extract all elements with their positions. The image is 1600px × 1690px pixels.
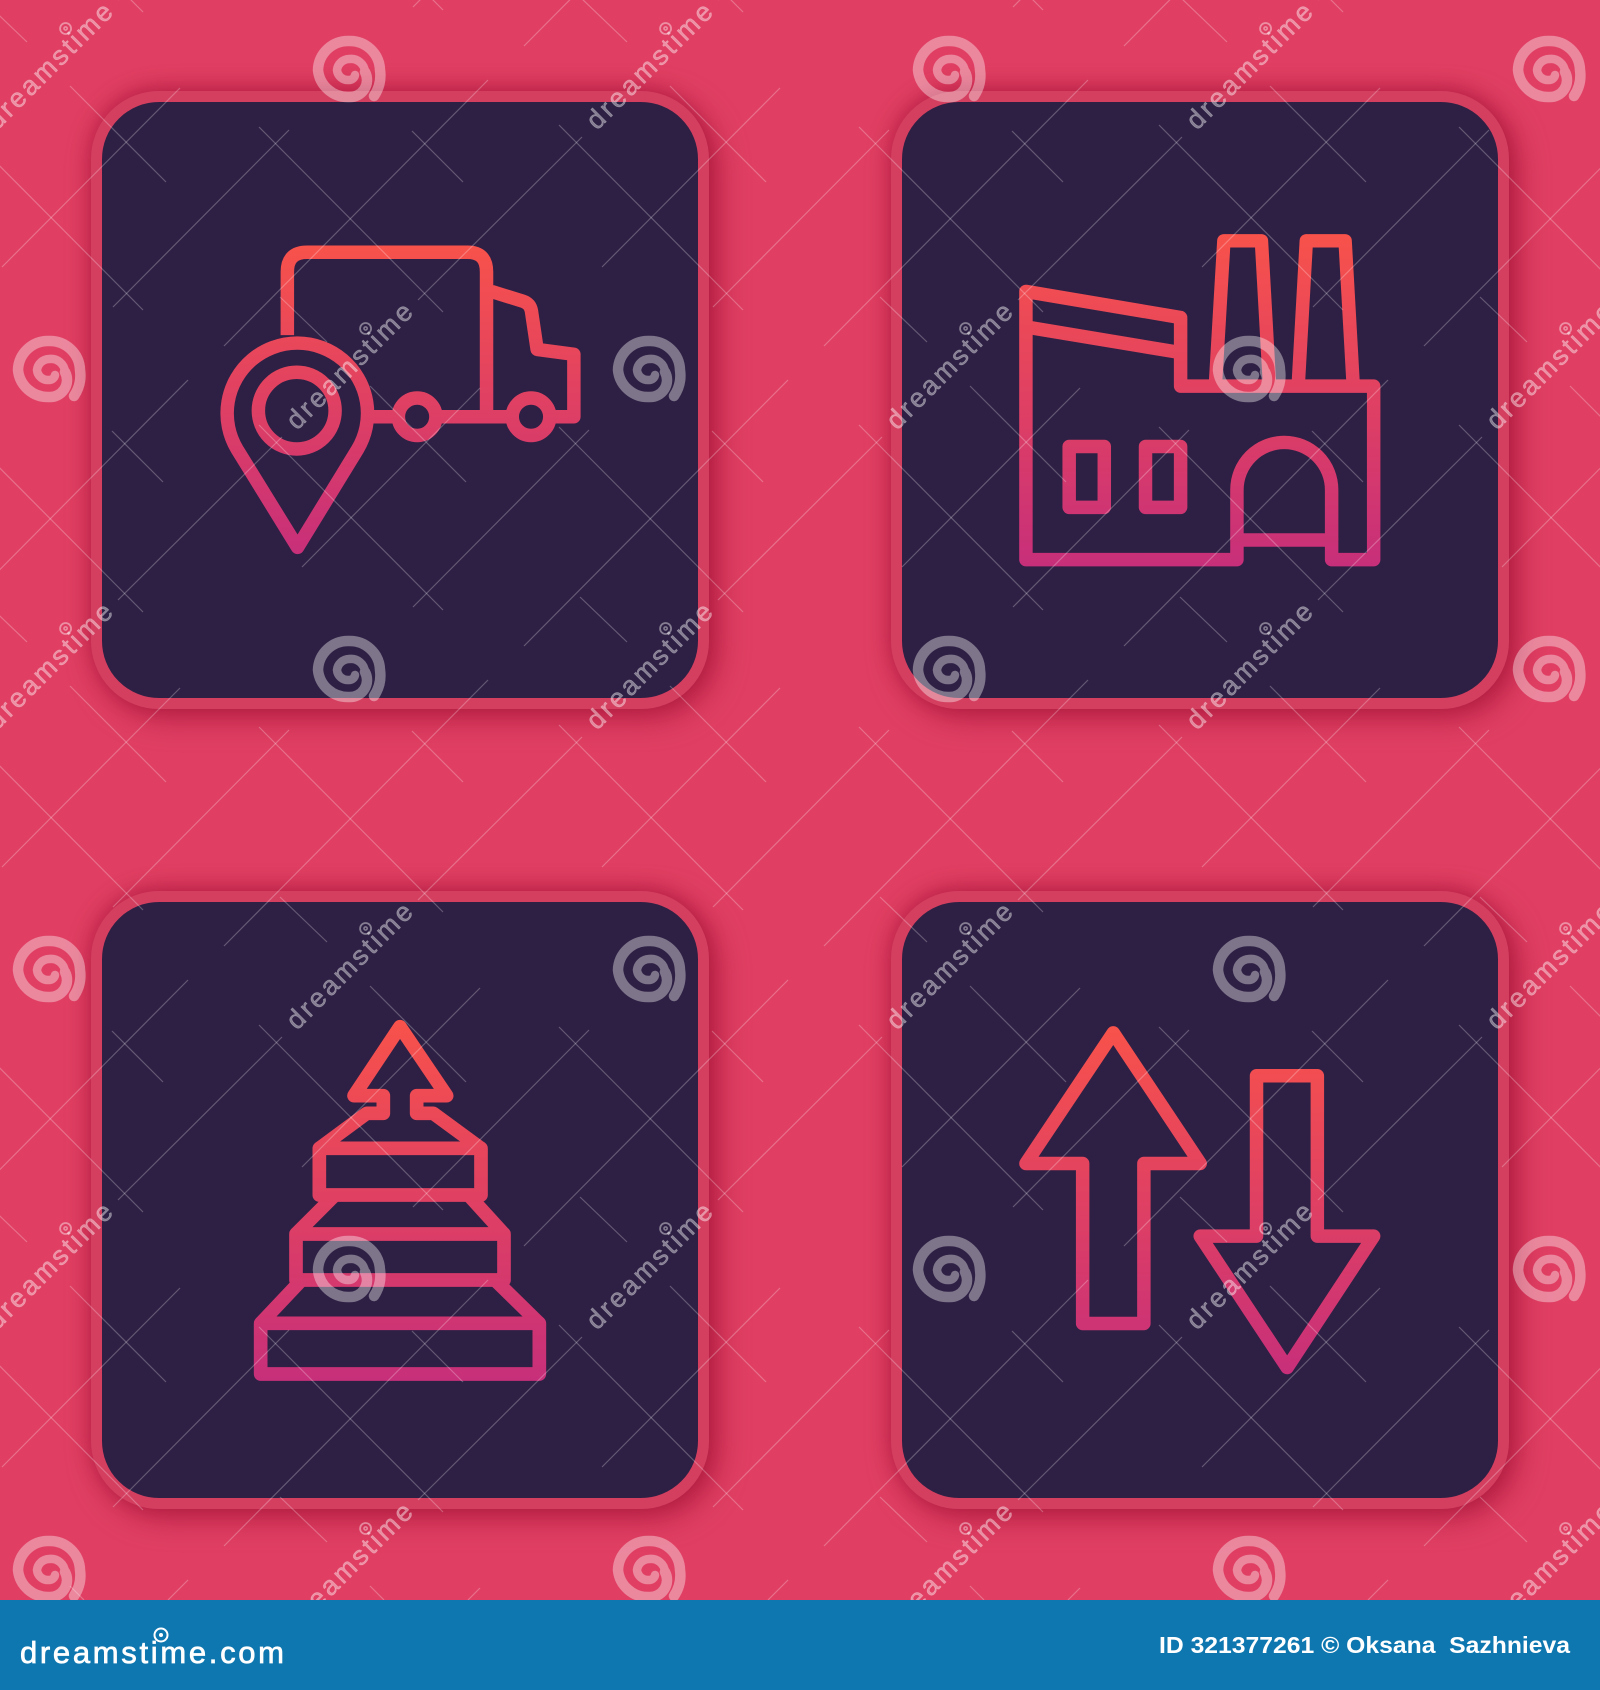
icon: factory with two chimneys: [1019, 234, 1380, 566]
watermark text: dreamstime: [1180, 1197, 1319, 1335]
watermark text: dreamstime: [580, 597, 719, 735]
watermark text: dreamstime: [1180, 0, 1319, 135]
watermark text: dreamstime: [880, 297, 1019, 435]
watermark text: dreamstime: [580, 0, 719, 135]
watermark text: dreamstime: [280, 897, 419, 1035]
panel: truck and location pin: [91, 91, 709, 709]
watermark text: dreamstime: [880, 897, 1019, 1035]
panel: pyramid with arrow: [91, 891, 709, 1509]
watermark text: dreamstime: [1180, 597, 1319, 735]
icon: delivery truck with map pin: [220, 246, 581, 554]
watermark text: dreamstime: [280, 297, 419, 435]
watermark text: dreamstime: [580, 1197, 719, 1335]
image id and author credit: ID 321377261 © Oksana Sazhnieva: [1159, 1632, 1570, 1658]
footer bar: [0, 1600, 1600, 1690]
panel: factory: [891, 91, 1509, 709]
icon: stepped pyramid with up arrow: [254, 1020, 546, 1381]
icon: up arrow and down arrow: [1019, 1026, 1380, 1374]
footer logo text: dreamstime.com: [20, 1635, 284, 1670]
panel: up and down arrows: [891, 891, 1509, 1509]
